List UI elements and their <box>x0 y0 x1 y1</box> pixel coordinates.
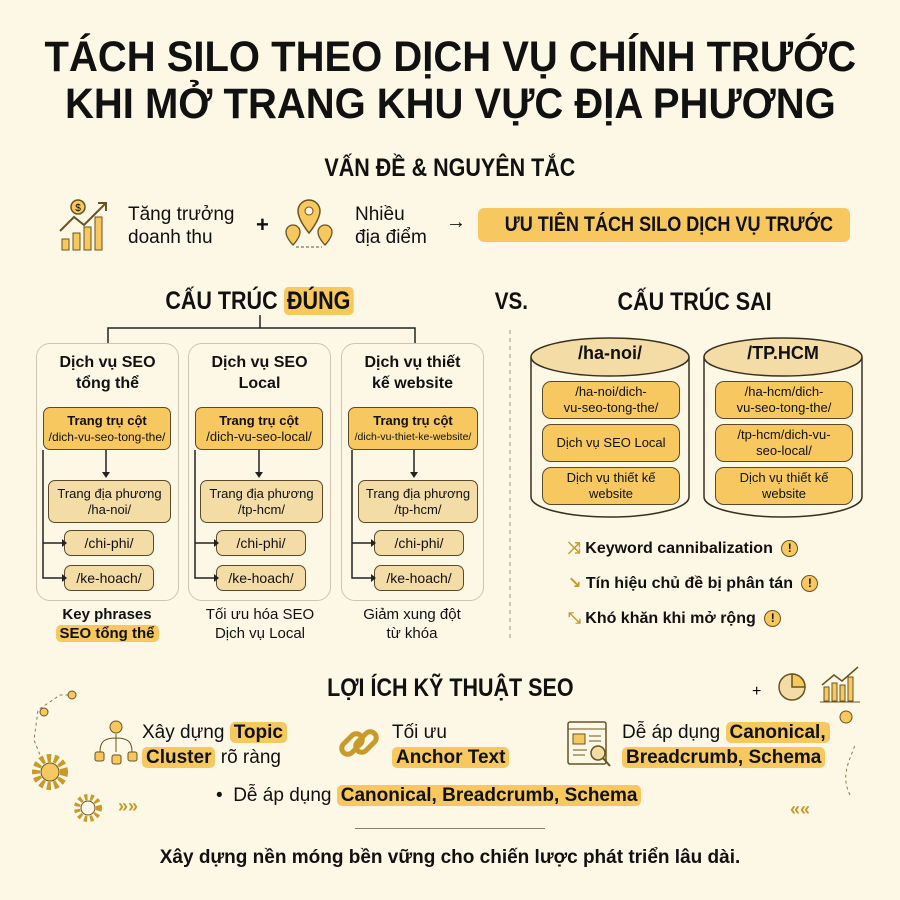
bullet line: • Dễ áp dụng Canonical, Breadcrumb, Schema <box>216 785 637 806</box>
arrow: → <box>446 211 466 233</box>
text: Dịch vụ thiết <box>364 354 460 371</box>
issue: keyword cannibalization: ! <box>788 541 792 555</box>
heading: correct structure: CẤU TRÚC ĐÚNG <box>166 287 351 315</box>
title: KHI MỞ TRANG KHU VỰC ĐỊA PHƯƠNG <box>65 80 835 128</box>
caption 2: Dịch vụ Local <box>215 625 305 642</box>
cylinder: ha-noi: /ha-noi/dich- <box>575 384 647 399</box>
icon: pie and chart: + <box>752 683 761 700</box>
text: Dịch vụ SEO <box>59 354 156 371</box>
text: Trang trụ cột <box>219 412 299 428</box>
cylinder: TP.HCM: /TP.HCM <box>747 343 819 363</box>
benefit: canonical: Dễ áp dụng Canonical, <box>622 722 826 743</box>
benefit: canonical <box>567 721 830 768</box>
cylinder: TP.HCM: /tp-hcm/dich-vu- <box>737 427 831 442</box>
text: many locations <box>355 204 427 248</box>
text: /ke-hoach/ <box>76 570 142 586</box>
cylinder: TP.HCM: Dịch vụ thiết kế <box>740 470 828 485</box>
cylinder: ha-noi <box>530 337 690 518</box>
benefit: anchor text: Anchor Text <box>396 747 505 768</box>
panel: SEO tong the <box>36 343 179 601</box>
text: /ke-hoach/ <box>228 570 294 586</box>
caption 3: Giảm xung đột <box>363 606 461 623</box>
benefit: anchor text: Tối ưu <box>392 722 447 743</box>
text: revenue growth: doanh thu <box>128 227 213 248</box>
text: /ke-hoach/ <box>386 570 452 586</box>
caption 2: Tối ưu hóa SEO <box>206 606 314 623</box>
text: Trang địa phương <box>57 486 162 500</box>
icon: chain link <box>339 729 379 757</box>
icon: cluster <box>94 720 138 764</box>
cylinder: ha-noi: Dịch vụ thiết kế <box>567 470 655 485</box>
text: kế website <box>372 375 453 392</box>
cylinder: TP.HCM <box>703 337 863 518</box>
benefit: topic cluster: Cluster rõ ràng <box>146 747 281 768</box>
cylinder: TP.HCM: /ha-hcm/dich- <box>745 384 823 399</box>
cylinder: ha-noi: website <box>589 486 633 501</box>
icon: growth chart <box>59 199 107 250</box>
text: Trang địa phương <box>366 486 470 500</box>
text: /dich-vu-thiet-ke-website/ <box>355 430 471 442</box>
text: /dich-vu-seo-tong-the/ <box>49 430 165 444</box>
text: Trang trụ cột <box>373 412 453 428</box>
text: /tp-hcm/ <box>238 502 285 516</box>
decoration: gears and dots <box>32 690 138 822</box>
text: /chi-phi/ <box>84 535 134 551</box>
tree connector <box>107 315 416 343</box>
text: /tp-hcm/ <box>395 502 441 516</box>
issue: scattered signals: ↘ Tín hiệu chủ đề bị phân tán <box>568 575 793 592</box>
text: Trang địa phương <box>209 486 314 500</box>
heading: vs: VS. <box>495 288 528 315</box>
decoration: gears and dots: »» <box>118 796 138 816</box>
text: many locations: Nhiều <box>355 204 405 225</box>
caption 1: Key phrases <box>62 606 152 623</box>
text: revenue growth: Tăng trưởng <box>128 204 235 225</box>
benefit: topic cluster: Xây dựng Topic <box>142 722 283 743</box>
text: /chi-phi/ <box>236 535 286 551</box>
panel: thiet ke website <box>341 343 484 601</box>
cylinder: TP.HCM: website <box>762 486 806 501</box>
caption 2 <box>206 606 314 642</box>
text: tổng thể <box>76 375 139 392</box>
text: Dịch vụ SEO <box>211 354 308 371</box>
text: /dich-vu-seo-local/ <box>206 428 312 444</box>
cylinder: ha-noi: /ha-noi/ <box>578 343 642 363</box>
heading: wrong structure: CẤU TRÚC SAI <box>618 288 772 316</box>
cylinder: TP.HCM: seo-local/ <box>756 443 812 458</box>
icon: location pins <box>285 199 333 248</box>
title: TÁCH SILO THEO DỊCH VỤ CHÍNH TRƯỚC <box>44 33 856 81</box>
issue: scattered signals: ! <box>808 576 812 590</box>
text: revenue growth <box>128 204 235 248</box>
caption 1: SEO tổng thể <box>60 625 154 642</box>
callout: priority <box>478 208 850 242</box>
caption 3 <box>363 606 461 642</box>
issue: hard to scale: ! <box>771 611 775 625</box>
text: Trang trụ cột <box>67 412 147 428</box>
cylinder: ha-noi: vu-seo-tong-the/ <box>564 400 658 415</box>
text: many locations: địa điểm <box>355 227 427 248</box>
text: Local <box>239 375 280 392</box>
caption 3: từ khóa <box>387 625 437 642</box>
benefit: topic cluster <box>94 720 287 768</box>
benefit: anchor text <box>339 722 509 768</box>
plus: + <box>256 212 269 237</box>
text: /ha-noi/ <box>88 502 131 516</box>
title <box>44 33 856 128</box>
icon: growth chart: $ <box>75 203 81 214</box>
icon: pie and chart <box>752 666 860 702</box>
issue: keyword cannibalization: ⤨ Keyword cannibalization <box>568 540 773 557</box>
icon: browser search <box>567 721 611 767</box>
cylinder: TP.HCM: vu-seo-tong-the/ <box>737 400 831 415</box>
benefit: canonical: Breadcrumb, Schema <box>626 747 821 768</box>
caption 1 <box>56 606 159 642</box>
cylinder: ha-noi: Dịch vụ SEO Local <box>556 435 666 450</box>
heading: problem & principle: VẤN ĐỀ & NGUYÊN TẮC <box>325 154 575 182</box>
heading: SEO benefits: LỢI ÍCH KỸ THUẬT SEO <box>327 674 573 702</box>
panel: SEO Local <box>188 343 331 601</box>
callout: priority: ƯU TIÊN TÁCH SILO DỊCH VỤ TRƯỚC <box>505 213 833 236</box>
text: /chi-phi/ <box>394 535 444 551</box>
issue: hard to scale: ⤡ Khó khăn khi mở rộng <box>568 610 756 627</box>
footer: Xây dựng nền móng bền vững cho chiến lược phát triển lâu dài. <box>160 847 740 868</box>
